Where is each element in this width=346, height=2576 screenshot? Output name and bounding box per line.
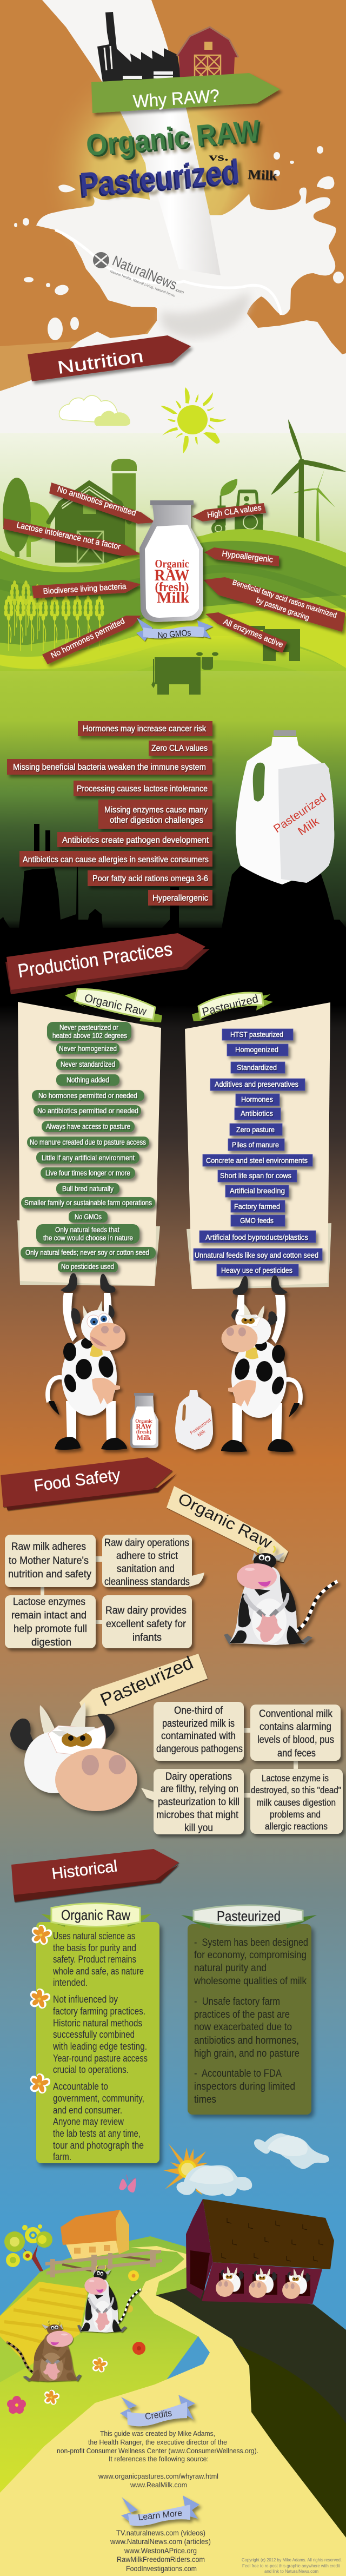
background: sky [0,2218,346,2576]
text: credits: non-profit Consumer Wellness Center (www.ConsumerWellness.org). [57,2447,258,2455]
text: organic raw history: the basis for purity and [53,1943,136,1953]
bubble: Lactose enzymes: digestion [31,1637,71,1648]
list: pasteurized milk effects: Missing beneficial bacteria weaken the immune system [13,763,206,772]
text: learn more links: TV.naturalnews.com (videos) [116,2529,205,2537]
text: learn more links: www.WestonAPrice.org [124,2547,197,2555]
logo: NaturalNews: .com [174,287,185,295]
text: copyright: Feel free to re-post this graphic anywhere with credit [242,2564,341,2568]
illustration: yellow road [0,2246,346,2576]
banner: Historical: Historical [51,1857,118,1883]
text: learn more links [110,2529,211,2573]
banner: Why RAW? [91,73,280,113]
callout: Beneficial fatty acid ratios: by pasture grazing [255,596,310,622]
text: pasteurized history: for economy, compromising [194,1949,307,1961]
callout: Biodiverse living bacteria [32,580,141,598]
text: pasteurized history: wholesome qualities of milk [194,1975,307,1987]
bubble: One-third of: One-third of [174,1705,223,1716]
panel: pasteurized practices: GMO feeds [240,1217,274,1225]
milk splash [0,0,346,433]
panel: pasteurized practices: Piles of manure [232,1141,279,1149]
bubble: Lactose enzyme: allergic reactions [265,1821,328,1832]
list: pasteurized milk effects: Missing enzymes cause many [104,805,208,815]
text: pasteurized history: times [194,2093,216,2105]
panel: pasteurized food safety bubbles [141,1702,343,1834]
panel: organic raw practices: Never pasteurized or [59,1023,118,1032]
icon: small pasteurized jug: Milk [196,1428,207,1438]
background: dark to brown to blue gradient [0,928,346,2218]
bubble: Raw milk adheres: to Mother Nature's [9,1555,89,1567]
icon: clouds [176,2134,329,2196]
ribbon: Pasteurized [192,993,273,1021]
background: orange top [0,0,346,433]
icon: angry cow head [10,1702,137,1811]
panel: organic raw practices: Smaller family or sustainable farm operations [24,1199,152,1207]
icon: red barn [177,27,238,83]
bubble: Lactose enzyme: milk causes digestion [257,1797,336,1808]
bubble: Lactose enzyme: problems and [270,1809,321,1820]
list: pasteurized milk effects: Hyperallergenic [152,894,208,903]
bubble: Lactose enzyme [250,1769,343,1834]
text: organic raw history: government, community, [53,2093,144,2104]
panel: organic raw practices: Always have access to pasture [46,1122,130,1131]
ribbon: Organic Raw: Organic Raw [83,992,148,1018]
icon: organic raw milk bottle [139,500,203,622]
callout: All enzymes active [205,612,287,653]
panel: pasteurized practices: Standardized [237,1064,277,1072]
icon: organic raw milk bottle: Organic [155,557,189,570]
banner: Food Safety: Food Safety [32,1465,122,1495]
icon: red barn with cows [186,2199,334,2304]
banner: Historical [11,1849,179,1902]
text: copyright [242,2558,342,2574]
panel: pasteurized practices: Hormones [241,1095,273,1104]
panel: organic raw practices: No hormones permitted or needed [38,1092,137,1100]
icon: farm silhouettes [3,459,137,564]
bubble: Raw dairy operations [102,1535,204,1588]
text: copyright: and link to NaturalNews.com [264,2569,318,2574]
text: credits: the Health Ranger, the executive director of the [88,2439,227,2446]
icon: sitting cow [224,1546,337,1645]
callout: Hypoallergenic [204,547,279,566]
panel: pasteurized practices: Heavy use of pesticides [221,1266,292,1274]
panel: organic raw practices: Live four times longer or more [45,1169,130,1177]
tag: Pasteurized [79,1653,208,1716]
list: pasteurized milk effects: Poor fatty acid rations omega 3-6 [92,874,208,883]
text: pasteurized history: natural purity and [194,1962,267,1974]
ribbon: Organic Raw heading: Organic Raw [61,1907,130,1923]
ribbon: Pasteurized: Pasteurized [201,993,260,1019]
bubble: Dairy operations: pasteurization to kill [158,1796,239,1808]
title: Organic RAW vs. Pasteurized Milk: Milk [248,168,278,183]
icon: factory [97,12,181,89]
text: pasteurized history: high grain, and no pasture [194,2047,300,2059]
ribbon: Credits: Credits [144,2408,172,2422]
icon: small raw milk bottle: (fresh) [136,1429,151,1435]
text: organic raw history: Anyone may review [53,2116,124,2127]
bubble: Raw milk adheres [5,1535,96,1587]
panel: pasteurized practices: Artificial food byproducts/plastics [205,1233,308,1241]
text: organic raw history: tour and photograph the [53,2140,144,2151]
icon: sun [161,387,227,453]
ribbon: Credits [120,2395,195,2426]
icon: organic raw milk bottle: (fresh) [155,580,189,595]
ribbon: Pasteurized heading: Pasteurized [217,1908,281,1924]
text: organic raw history: Uses natural science as [53,1931,135,1941]
list: pasteurized milk effects: Processing causes lactose intolerance [77,784,208,794]
text: organic raw history [52,1931,148,2162]
icon: brown cow [6,2320,82,2381]
icon: small pasteurized jug: Pasteurized [189,1417,212,1436]
icon: small raw milk bottle: RAW [136,1423,152,1430]
text: organic raw history: safety. Product remains [53,1954,136,1965]
panel: historical organic raw [30,1903,159,2163]
icon: small pasteurized jug [175,1390,213,1450]
panel: pasteurized practices: Unnatural feeds like soy and cotton seed [195,1251,318,1259]
banner: Nutrition: Nutrition [56,346,144,378]
icon: swirly tree [4,2224,52,2271]
tag: Organic Raw [167,1486,288,1562]
text: organic raw history: Accountable to [53,2081,108,2092]
icon: wheat field [4,580,104,651]
icon: small raw milk bottle: Organic [135,1418,152,1424]
panel: organic raw practices: Little if any artificial environment [42,1154,135,1162]
panel: organic raw practices: Only natural feeds; never soy or cotton seed [25,1249,149,1257]
list: pasteurized milk effects: Zero CLA values [151,744,208,753]
icon: pasteurized milk jug [236,730,334,884]
panel: pasteurized practices: Antibiotics [241,1109,273,1118]
background: green to dark gradient [0,391,346,930]
icon: cow silhouettes [151,626,300,695]
panel: organic raw practices: Never homogenized [59,1045,117,1053]
panel: organic raw practices: No antibiotics permitted or needed [37,1107,138,1115]
panel: organic raw practices: Only natural feeds that [55,1226,119,1234]
text: pasteurized history: now exacerbated due to [194,2021,292,2033]
bubble: Raw dairy provides: excellent safety for [106,1619,187,1630]
bubble: Lactose enzymes: remain intact and [11,1610,86,1621]
panel: pasteurized practices: Homogenized [235,1046,278,1054]
bubble: Dairy operations: are filthy, relying on [161,1784,238,1795]
icon: happy cow holding sign [48,1273,127,1450]
bubble: One-third of: dangerous pathogens [156,1743,243,1755]
text: organic raw history: Not influenced by [53,1994,118,2005]
skyline silhouette [0,824,346,936]
icon: fence [45,2250,162,2277]
text: organic raw history: whole and safe, as nature [52,1966,144,1977]
panel: organic raw practices: the cow would choose in nature [43,1234,133,1242]
text: organic raw history: Year-round pasture access [53,2053,148,2064]
text: credits: It references the following source: [109,2455,209,2463]
text: pasteurized history: antibiotics and hormones, [194,2035,299,2046]
icon: tractor [211,479,263,536]
bubble: Lactose enzyme: Lactose enzyme is [262,1773,329,1784]
icon: wind turbines [271,419,346,541]
logo: NaturalNews: Natural Health, Natural Living, Natural News [109,269,176,298]
ribbon: Organic Raw [65,989,162,1022]
banner: Why RAW?: Why RAW? [132,85,220,111]
panel: pasteurized practices: Zero pasture [236,1126,275,1134]
bubble: Raw dairy provides [102,1595,192,1648]
icon: flowers [30,1925,52,2093]
banner: Food Safety [1,1457,177,1510]
bubble: Raw dairy operations: sanitation and [117,1563,175,1575]
bubble: Lactose enzymes [5,1595,96,1648]
text: learn more links: www.NaturalNews.com (articles) [110,2538,211,2546]
bubble: One-third of [154,1702,244,1761]
panel: pasteurized practices [185,993,331,1289]
icon: clouds [59,395,130,426]
panel: organic raw practices: Nothing added [66,1076,109,1084]
callout: No antibiotics permitted [49,483,156,524]
panel: pasteurized practices: Additives and preservatives [215,1080,298,1088]
banner: Production Practices [5,933,210,994]
panel: organic raw practices: Never standardized [61,1060,115,1068]
text: organic raw history: intended. [53,1977,88,1988]
title: Organic RAW vs. Pasteurized Milk [78,113,278,204]
bubble: Raw dairy provides: infants [132,1632,162,1643]
text: pasteurized history: - System has been designed [194,1937,308,1948]
tag: Organic Raw: Organic Raw [175,1490,275,1553]
bubble: Raw dairy operations: Raw dairy operations [104,1537,189,1549]
text: pasteurized history [194,1937,308,2105]
callout: No antibiotics permitted: No antibiotics permitted [56,485,137,518]
illustration: green hill [0,2236,205,2499]
icon: sun behind cloud [163,2143,208,2195]
text: pasteurized history: - Accountable to FDA [194,2068,282,2079]
text: organic raw history: successfully combined [53,2029,135,2040]
text: credits: www.organicpastures.com/whyraw.html [98,2473,218,2480]
ribbon: Learn More [121,2495,199,2526]
bubble: Dairy operations: microbes that might [156,1809,239,1821]
callouts: organic raw benefits [3,483,345,664]
panel: organic raw practices: No GMOs [75,1213,102,1221]
text: organic raw history: the lab tests at any time, [53,2128,141,2139]
panel: pasteurized practices: HTST pasteurized [230,1031,283,1039]
bubble: Dairy operations: kill you [184,1822,213,1834]
icon: butterfly [119,2175,136,2192]
bubble: Raw milk adheres: nutrition and safety [8,1569,91,1580]
text: organic raw history: Historic natural methods [53,2018,142,2029]
bubble: Raw dairy operations: adhere to strict [116,1550,178,1562]
logo: NaturalNews: NaturalNews [110,253,179,293]
title: Organic RAW vs. Pasteurized Milk: Pasteurized [78,153,241,204]
text: learn more links: RawMilkFreedomRiders.com [117,2555,205,2564]
panel: organic raw practices: Bull bred naturally [62,1185,114,1193]
panel: organic raw practices [17,989,162,1286]
list: pasteurized milk effects: Antibiotics create pathogen development [62,836,209,845]
title: Organic RAW vs. Pasteurized Milk: vs. [209,150,229,163]
icon: small raw milk bottle [130,1393,158,1448]
banner: Production Practices: Production Practices [17,939,174,982]
bubble: Conventional milk: and feces [277,1748,316,1759]
bubble: Raw milk adheres: Raw milk adheres [11,1541,86,1553]
ribbon: No GMOs: No GMOs [157,629,191,640]
icon: meadow flowers [7,2270,145,2414]
list: pasteurized milk effects: other digestion challenges [110,816,203,825]
text: pasteurized history: - Unsafe factory farm [194,1996,280,2007]
ribbon: Organic Raw heading [41,1903,151,1927]
bubble: Lactose enzymes: help promote full [14,1623,87,1635]
bubble: Dairy operations [141,1769,244,1834]
list: pasteurized milk effects: Hormones may increase cancer risk [83,724,206,734]
panel: organic raw practices: No manure created due to pasture access [30,1138,146,1146]
text: organic raw history: farm. [53,2151,71,2162]
icon: pasteurized milk jug: Milk [296,815,322,838]
icon: black and white hill cow [77,2265,141,2333]
text: organic raw history: crucial to operations. [53,2064,129,2075]
bubble: One-third of: contaminated with [161,1730,236,1742]
panel: pasteurized practices: Concrete and steel environments [206,1157,308,1165]
tag: Pasteurized: Pasteurized [97,1653,196,1710]
callout: Lactose intolerance not a factor: Lactose intolerance not a factor [16,520,121,552]
text: learn more links: FoodInvestigations.com [126,2565,197,2573]
banner: Nutrition [28,335,191,381]
icon: organic raw milk bottle: Milk [157,589,190,606]
panel: pasteurized practices: Short life span for cows [220,1172,291,1180]
panel: pasteurized practices: Factory farmed [234,1203,280,1211]
ribbon: Learn More: Learn More [138,2508,183,2522]
list: pasteurized practice boxes [194,1029,322,1276]
callout: High CLA values [192,503,266,521]
bubble: Lactose enzymes: Lactose enzymes [13,1596,85,1608]
text: organic raw history: factory farming practices. [53,2006,145,2017]
text: credits: www.RealMilk.com [130,2481,187,2489]
text: copyright: Copyright (c) 2012 by Mike Adams. All rights reserved. [242,2558,342,2562]
bubble: Conventional milk: Conventional milk [259,1708,332,1720]
bubble: Conventional milk: levels of blood, pus [257,1734,334,1746]
ribbon: Pasteurized heading [181,1905,317,1928]
icon: pasteurized milk jug: Pasteurized [271,791,329,835]
panel: organic raw practices: No pesticides used [61,1263,114,1271]
panel: pasteurized practices: Artificial breeding [230,1187,285,1195]
text: credits [57,2430,258,2489]
bubble: Dairy operations: Dairy operations [165,1771,232,1782]
panel: historical pasteurized [181,1905,317,2115]
text: organic raw history: with leading edge testing. [52,2041,147,2052]
icon: organic raw milk bottle: RAW [155,566,189,584]
bubble: One-third of: pasteurized milk is [162,1718,235,1729]
callout: Biodiverse living bacteria: Biodiverse living bacteria [43,582,127,596]
list: pasteurized milk effects: Antibiotics can cause allergies in sensitive consumers [23,855,209,864]
callout: Beneficial fatty acid ratios: Beneficial fatty acid ratios maximized [231,578,338,619]
hills [0,529,346,687]
text: pasteurized history: practices of the past are [194,2009,290,2020]
bubble: Raw dairy provides: Raw dairy provides [105,1605,187,1616]
icon: small raw milk bottle: Milk [137,1434,151,1442]
bubble: Conventional milk: contains alarming [260,1721,331,1733]
list: organic raw pills [21,1022,156,1272]
bubble: Raw dairy operations: cleanliness standards [104,1576,190,1588]
callout: Beneficial fatty acid ratios [203,577,345,632]
callout: Hypoallergenic: Hypoallergenic [222,549,274,565]
icon: barn cow heads [216,2267,310,2299]
ribbon: No GMOs [136,618,213,641]
illustration: dark factory hill [156,2288,346,2538]
panel: organic raw food safety bubbles [5,1535,204,1648]
title: Organic RAW vs. Pasteurized Milk: Organic RAW [85,113,261,162]
icon: angry cow holding sign [221,1275,301,1452]
text: organic raw history: and end consumer. [53,2105,122,2116]
list: pasteurized milk effects [7,721,212,906]
icon: farmhouse [61,2210,129,2260]
text: credits: This guide was created by Mike Adams, [100,2430,215,2438]
callout: All enzymes active: All enzymes active [222,617,284,650]
callout: High CLA values: High CLA values [207,503,262,520]
panel: organic raw practices: heated above 102 degrees [52,1032,127,1040]
callout: No hormones permitted: No hormones permitted [49,617,127,660]
bubble: Conventional milk [250,1705,341,1761]
text: pasteurized history: inspectors during limited [194,2080,295,2092]
